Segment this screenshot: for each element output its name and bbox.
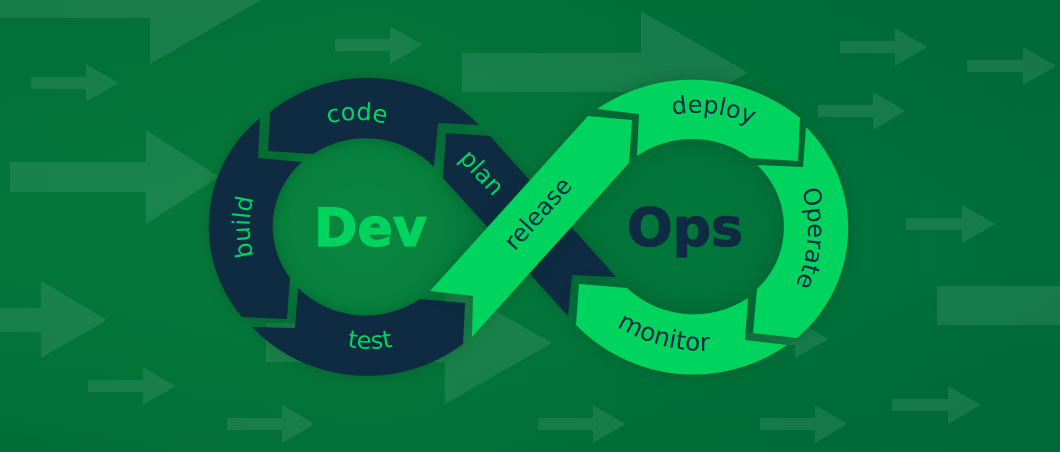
- arrow: behind operate: [740, 320, 828, 358]
- label: plan: plan: [454, 144, 510, 201]
- arrow: large right edge: [937, 286, 1060, 325]
- dev loop: [209, 78, 616, 376]
- arrow: small lower right: [892, 386, 981, 424]
- arrow: small right: [906, 205, 996, 243]
- arrow: small left top: [31, 64, 118, 102]
- ops loop: [430, 80, 848, 375]
- segment: release: [430, 116, 632, 337]
- arrow: large top centre: [462, 11, 748, 134]
- label: release: release: [498, 172, 578, 256]
- arrow: small bottom right: [760, 405, 848, 443]
- heading: Ops: Ops: [627, 198, 743, 259]
- arrow: large left: [10, 130, 219, 224]
- label: build: build: [232, 196, 253, 258]
- heading: Dev: Dev: [314, 198, 427, 259]
- arrow: large behind test: [266, 282, 552, 404]
- segment: deploy: [597, 80, 800, 161]
- arrow: small upper right: [818, 92, 906, 130]
- ops inner glow: [568, 107, 818, 347]
- dev inner glow: [238, 107, 488, 347]
- arrow: small top right: [840, 28, 928, 66]
- segment: code: [268, 78, 479, 167]
- label: code: code: [328, 102, 386, 123]
- arrow: small far right: [967, 47, 1056, 85]
- label: monitor: monitor: [618, 316, 710, 351]
- label: deploy: deploy: [673, 95, 756, 126]
- arrow: top-left large: [0, 0, 282, 64]
- segment: build: [209, 118, 302, 319]
- arrow: small lower left: [88, 367, 176, 405]
- arrow: left edge: [0, 281, 107, 358]
- segment: plan: [443, 133, 616, 316]
- arrow: small bottom centre: [538, 405, 626, 443]
- label: operate: Operate: [797, 188, 822, 288]
- arrow: small bottom left: [227, 405, 314, 443]
- segment: monitor: [576, 284, 787, 375]
- segment: test: [252, 288, 465, 376]
- arrow: small top centre: [335, 26, 422, 64]
- segment: operate: [753, 127, 848, 338]
- label: test: test: [349, 330, 392, 349]
